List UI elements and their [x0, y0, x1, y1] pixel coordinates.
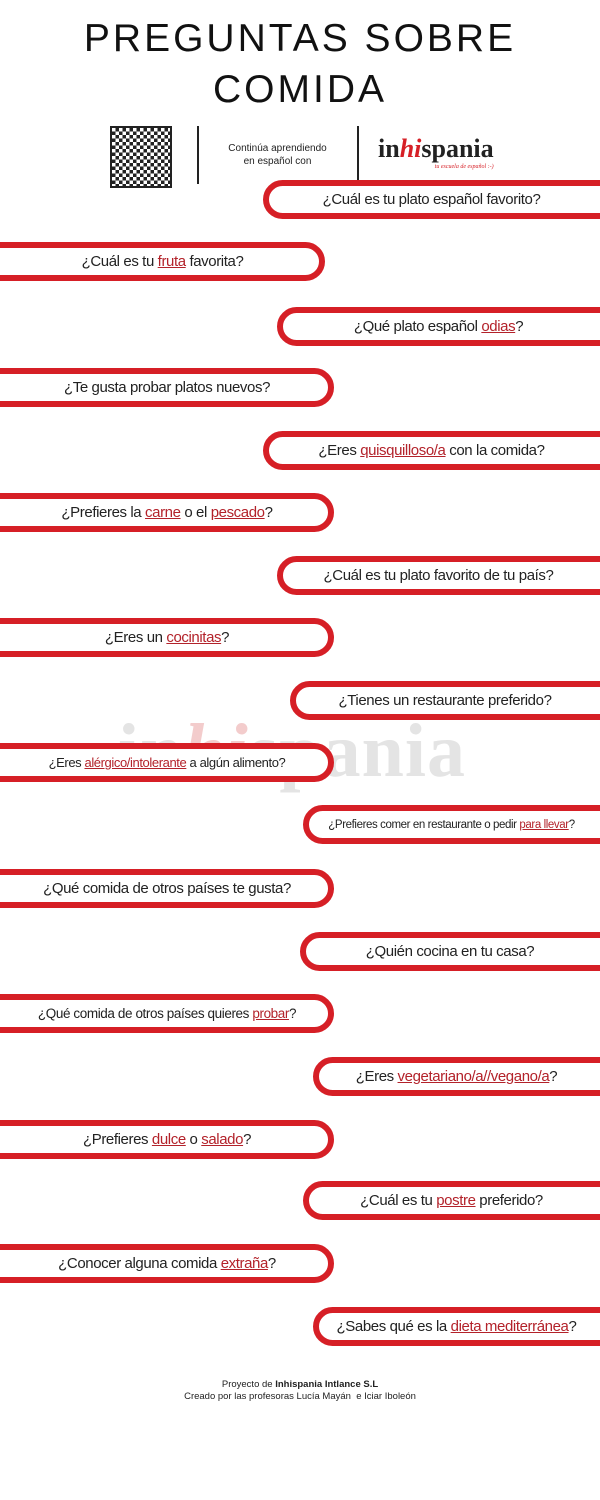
question 10 — [0, 743, 334, 782]
question 16 — [0, 1120, 334, 1159]
question 18 — [0, 1244, 334, 1283]
question 1 — [263, 180, 600, 219]
question 17: postre — [436, 1192, 476, 1209]
question 10: alérgico/intolerante — [84, 755, 186, 770]
question 15: ¿Eres ? — [356, 1068, 557, 1085]
question 8: ¿Eres un ? — [105, 629, 229, 646]
text: continua — [228, 143, 327, 167]
question 17 — [303, 1181, 600, 1220]
question 6: ¿Prefieres la o el ? — [61, 504, 273, 521]
header row — [110, 126, 494, 188]
title: PREGUNTAS SOBRE — [84, 17, 516, 60]
question 15: vegetariano/a//vegano/a — [398, 1068, 549, 1085]
footer: Proyecto de Inhispania Intlance S.L — [222, 1379, 378, 1390]
question 3 — [277, 307, 600, 346]
question 3: ¿Qué plato español ? — [354, 318, 523, 335]
question 13: ¿Quién cocina en tu casa? — [366, 943, 534, 960]
question 11: ¿Prefieres comer en restaurante o pedir ? — [328, 818, 575, 830]
question 11 — [303, 805, 600, 844]
footer: Creado por las profesoras Lucía Mayán e Iciar Iboleón — [184, 1391, 416, 1402]
question 16: salado — [201, 1131, 243, 1148]
text: continua: en español con — [244, 156, 311, 167]
footer — [184, 1379, 416, 1402]
question 6 — [0, 493, 334, 532]
question 12: ¿Qué comida de otros países te gusta? — [43, 880, 291, 897]
question 8: cocinitas — [166, 629, 221, 646]
watermark: inhispania — [118, 709, 466, 793]
question 9: ¿Tienes un restaurante preferido? — [338, 692, 552, 709]
question 12 — [0, 869, 334, 908]
question 9 — [290, 681, 600, 720]
question 7 — [277, 556, 600, 595]
question 2: fruta — [158, 253, 186, 270]
question 15 — [313, 1057, 600, 1096]
question 10: ¿Eres a algún alimento? — [49, 755, 285, 770]
logo: inhispania — [378, 134, 494, 163]
question 14: ¿Qué comida de otros países quieres ? — [38, 1006, 296, 1021]
question 2 — [0, 242, 325, 281]
question 11: para llevar — [519, 818, 569, 830]
question 5: ¿Eres con la comida? — [318, 442, 545, 459]
question 13 — [300, 932, 600, 971]
question 19 — [313, 1307, 600, 1346]
question 6: pescado — [211, 504, 265, 521]
question 16: ¿Prefieres o ? — [83, 1131, 251, 1148]
question 14: probar — [252, 1006, 289, 1021]
question 19: ¿Sabes qué es la ? — [337, 1318, 576, 1335]
question 3: odias — [481, 318, 515, 335]
question 1: ¿Cuál es tu plato español favorito? — [323, 191, 540, 208]
icon: QR code — [110, 126, 172, 188]
question 2: ¿Cuál es tu favorita? — [82, 253, 243, 270]
question 5: quisquilloso/a — [360, 442, 446, 459]
question 17: ¿Cuál es tu preferido? — [360, 1192, 543, 1209]
question 8 — [0, 618, 334, 657]
question 16: dulce — [152, 1131, 186, 1148]
question 5 — [263, 431, 600, 470]
text: continua: Continúa aprendiendo — [228, 143, 327, 154]
question 4: ¿Te gusta probar platos nuevos? — [64, 379, 270, 396]
title line 2: COMIDA — [213, 68, 387, 111]
question 19: dieta mediterránea — [451, 1318, 569, 1335]
question 18: extraña — [221, 1255, 268, 1272]
question 6: carne — [145, 504, 181, 521]
question 14 — [0, 994, 334, 1033]
logo: tu escuela de español :-) — [435, 164, 494, 170]
question 7: ¿Cuál es tu plato favorito de tu país? — [324, 567, 553, 584]
question 4 — [0, 368, 334, 407]
question 18: ¿Conocer alguna comida ? — [58, 1255, 276, 1272]
